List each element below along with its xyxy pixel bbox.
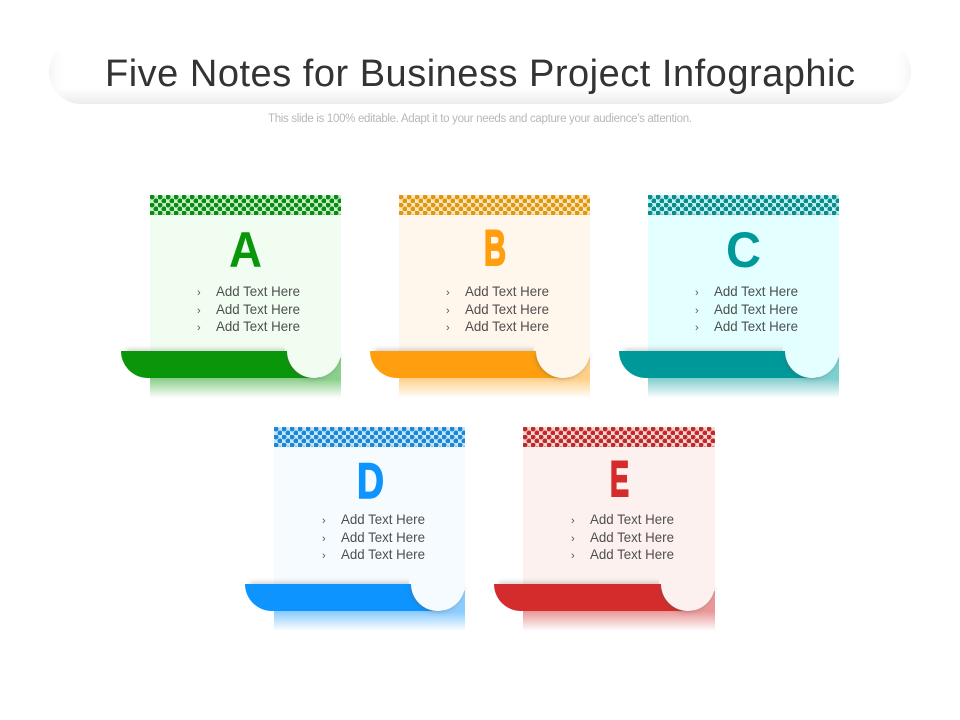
list B: ›	[446, 322, 450, 334]
list E: Add Text Here	[590, 546, 674, 562]
list D: ›	[322, 550, 326, 562]
letter E: E	[610, 451, 629, 507]
list A: Add Text Here	[216, 283, 300, 299]
note card D	[245, 427, 465, 631]
list B: ›	[446, 305, 450, 317]
list E: ›	[571, 550, 575, 562]
list C: ›	[695, 305, 699, 317]
list A: Add Text Here	[216, 301, 300, 317]
note card A	[121, 195, 341, 398]
title: Five Notes for Business Project Infographic	[105, 53, 855, 95]
note card B	[370, 195, 590, 398]
list C: Add Text Here	[714, 301, 798, 317]
list B	[446, 283, 549, 334]
letter B: B	[484, 220, 506, 276]
letter C: C	[726, 222, 761, 278]
list A	[197, 283, 300, 334]
list D: Add Text Here	[341, 546, 425, 562]
list D	[322, 511, 425, 562]
list A: ›	[197, 287, 201, 299]
list B: Add Text Here	[465, 301, 549, 317]
list C: Add Text Here	[714, 318, 798, 334]
list C: Add Text Here	[714, 283, 798, 299]
title bar	[49, 40, 911, 104]
subtitle: This slide is 100% editable. Adapt it to your needs and capture your audience's attention.	[268, 113, 692, 125]
note card E	[494, 427, 715, 631]
list C: ›	[695, 322, 699, 334]
list D: ›	[322, 533, 326, 545]
letter A: A	[229, 222, 262, 278]
list E: ›	[571, 533, 575, 545]
list B: ›	[446, 287, 450, 299]
list D: Add Text Here	[341, 511, 425, 527]
list B: Add Text Here	[465, 283, 549, 299]
list E	[571, 511, 674, 562]
list A: ›	[197, 322, 201, 334]
letter D: D	[357, 453, 384, 509]
list B: Add Text Here	[465, 318, 549, 334]
list C: ›	[695, 287, 699, 299]
list E: Add Text Here	[590, 529, 674, 545]
list D: Add Text Here	[341, 529, 425, 545]
list D: ›	[322, 515, 326, 527]
list A: Add Text Here	[216, 318, 300, 334]
note card C	[619, 195, 839, 398]
list C	[695, 283, 798, 334]
list A: ›	[197, 305, 201, 317]
list E: ›	[571, 515, 575, 527]
list E: Add Text Here	[590, 511, 674, 527]
